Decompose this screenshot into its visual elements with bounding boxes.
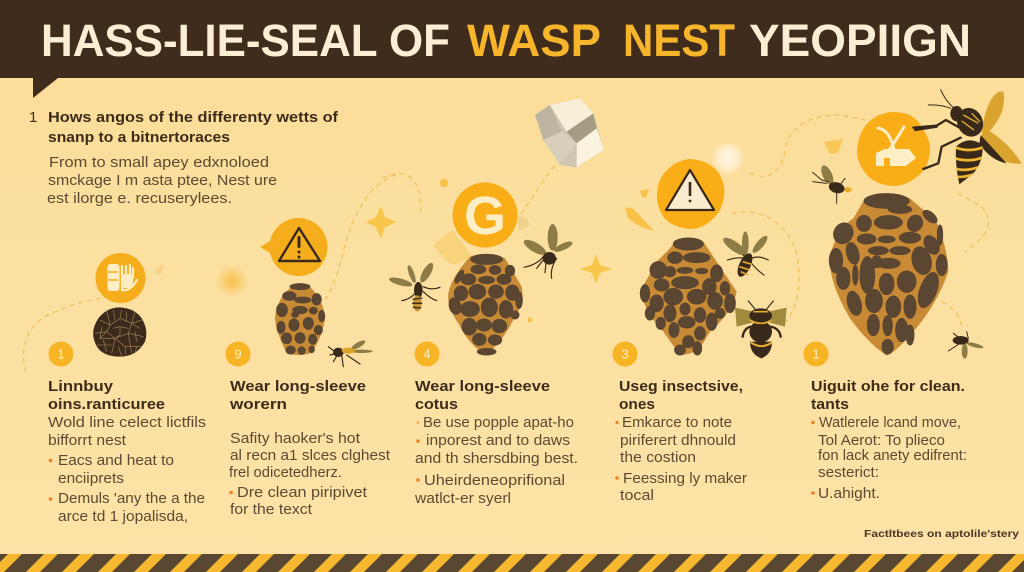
stage 5: text: fon lack anety edifrent: [818,448,967,464]
stage 3: text: and th shersdbing best. [415,451,578,467]
stage 2: warning icon [260,218,328,276]
sparkles and glows [154,139,843,322]
stage 4: badge [612,342,638,366]
stage 2: text: Wear long-sleeve [230,378,366,395]
stage 1: text: Wold line celect lictfils [48,415,206,431]
intro text block: snanp to a bitnertoraces [48,129,230,146]
stage 3: text: Be use popple apat-ho [423,415,574,431]
rock [535,98,604,167]
stage 2: text: for the texct [230,502,312,518]
title text: HASS-LIE-SEAL OF [41,15,450,66]
stage 5: nest [829,194,948,356]
stage 3: badge [414,342,440,366]
title banner [0,0,1024,98]
stage 1: text: Linnbuy [48,378,114,395]
stage 2: badge: 9 [234,346,242,362]
stage 2: text: frel odicetedherz. [229,465,342,481]
stage 5: text: Tol Aerot: To plieco [818,433,945,449]
intro text block: est ilorge e. recuserylees. [47,191,232,207]
stage 2: badge [226,342,250,366]
stage 1: text: Eacs and heat to [58,453,174,469]
stage 1: text: Demuls 'any the a the [58,491,205,507]
stage 3: text: Wear long-sleeve [415,378,550,395]
stage 3: right wasp [522,224,574,278]
stage 4: text: the costion [620,450,696,466]
title end: YEOPIIGN [749,15,971,66]
title accent: NEST [623,15,735,66]
stage 5: badge [804,342,828,366]
stage 4: text: piriferert dhnould [620,433,736,449]
stage 3: nest [447,254,522,355]
stage 4: text: Emkarce to note [622,415,732,431]
stage 1: badge: 1 [57,346,65,362]
stage 5: badge: 1 [812,346,820,362]
stage 2: text [229,378,390,518]
footer note: Factltbees on aptolile'stery [864,528,1019,540]
stage 3: G icon [452,182,518,248]
stage 1: text: enciiprets [58,471,124,487]
stage 4: nest [640,238,737,355]
stage 5: large wasp [913,90,1022,184]
stage 2: text: worern [229,396,287,413]
stage 4: text: Useg insectsive, [619,378,743,395]
stage 1: text [48,378,206,525]
stage 4: badge: 3 [621,346,629,362]
intro text block: 1 [29,109,37,126]
stage 4: text [615,378,747,504]
stage 5: small wasp bottom [948,332,984,359]
stage 3: left wasp [388,261,440,311]
stage 5: text [811,378,967,502]
intro text block [29,109,339,207]
stage 3: text [414,378,578,507]
intro text block: smckage I m asta ptee, Nest ure [48,173,277,189]
stage 2: nest [275,284,325,355]
stage 3: text: watlct-er syerl [414,491,511,507]
intro text block: From to small apey edxnoloed [49,155,269,171]
hazard stripe [0,554,1024,572]
stage 1: icon glove [96,253,146,303]
stage 1: text: arce td 1 jopalisda, [58,509,188,525]
stage 1: badge [48,342,74,366]
stage 5: small wasp top [813,164,852,203]
stage 3: text: Uheirdeneoprifional [424,473,565,489]
stage 2: text: Dre clean piripivet [237,485,367,501]
stage 3: G icon: G [464,186,506,246]
stage 5: text: Watlerele lcand move, [819,415,961,431]
stage 2: text: al recn a1 slces clghest [230,448,390,464]
stage 2: text: Safity haoker's hot [230,431,360,447]
dashed flight paths [24,115,988,372]
stage 1: small nest [93,307,146,357]
stage 5: text: U.ahight. [818,486,880,502]
stage 3: text: inporest and to daws [426,433,570,449]
stage 5: text: Uiguit ohe for clean. [811,378,965,395]
stage 4: text: tocal [620,488,654,504]
intro text block: Hows angos of the differenty wetts of [48,109,339,126]
stage 4: bee [735,301,787,358]
stage 4: text: Feessing ly maker [623,471,747,487]
title accent: WASP [467,15,601,66]
stage 4: warning icon [657,159,724,229]
stage 1: text: oins.ranticuree [48,396,165,413]
stage 1: text: bifforrt nest [48,433,126,449]
stage 5: tool icon [857,112,930,186]
stage 4: text: ones [619,396,655,413]
stage 5: text: tants [811,396,849,413]
stage 5: text: sesterict: [818,465,879,481]
stage 2: wasp [328,339,373,367]
stage 3: text: cotus [415,396,458,413]
stage 3: badge: 4 [423,346,431,362]
stage 4: wasp [721,231,770,279]
